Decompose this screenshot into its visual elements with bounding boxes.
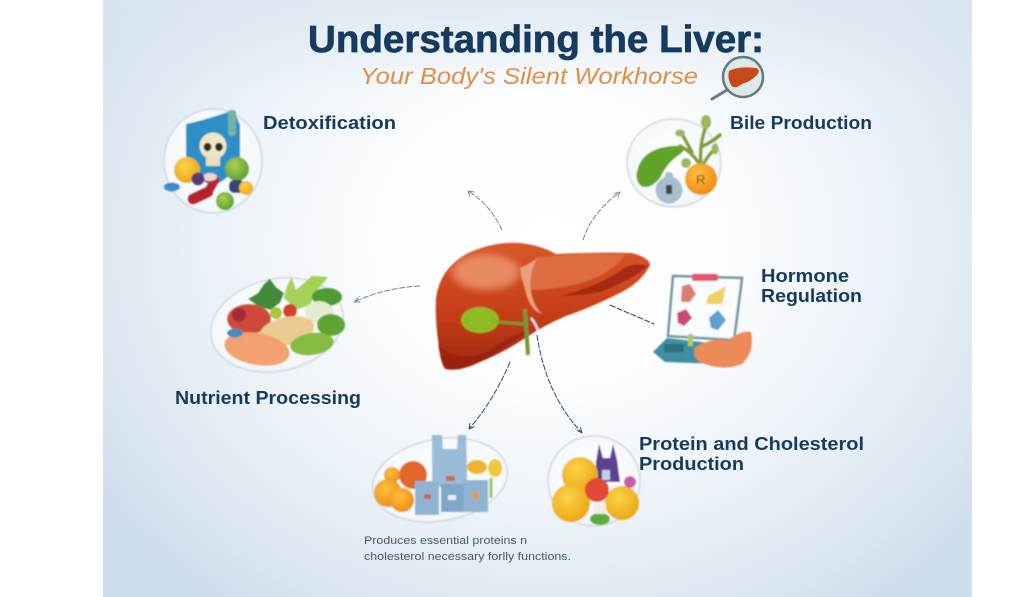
label: protein and cholesterol production — [639, 434, 864, 474]
label: hormone regulation — [761, 266, 862, 306]
icon: protein and cholesterol plate — [548, 436, 640, 526]
label: detoxification: Detoxification — [263, 112, 396, 133]
label: protein and cholesterol production: Protein and Cholesterol — [639, 434, 864, 454]
arrow: to hormone regulation — [610, 305, 654, 324]
label: bile production: Bile Production — [730, 113, 872, 133]
arrow: to bottom left panel — [469, 362, 510, 429]
arrow: to protein panel — [537, 335, 582, 433]
icon: detoxification — [164, 109, 262, 213]
icon: bile production — [627, 115, 721, 207]
icon: nutrient plate — [202, 266, 352, 384]
title: Understanding the Liver: — [308, 19, 764, 61]
icon: magnifying glass with liver — [712, 57, 763, 99]
label: protein and cholesterol production: Production — [639, 454, 744, 474]
label: hormone regulation: Regulation — [761, 286, 862, 306]
description text: Produces essential proteins n — [364, 535, 527, 547]
description text — [364, 535, 571, 563]
icon: hormone clipboard — [653, 274, 752, 368]
label: hormone regulation: Hormone — [761, 266, 849, 286]
arrow: to detoxification — [468, 191, 502, 230]
icon: bile production: R — [696, 172, 705, 187]
liver illustration — [436, 243, 650, 370]
arrow: to nutrient processing — [354, 286, 420, 302]
label: nutrient processing: Nutrient Processing — [175, 387, 361, 408]
arrow: to bile production — [583, 192, 620, 240]
subtitle: Your Body's Silent Workhorse — [360, 63, 698, 89]
description text: cholesterol necessary forlly functions. — [364, 551, 571, 563]
icon: protein plate with boxes — [366, 428, 514, 532]
